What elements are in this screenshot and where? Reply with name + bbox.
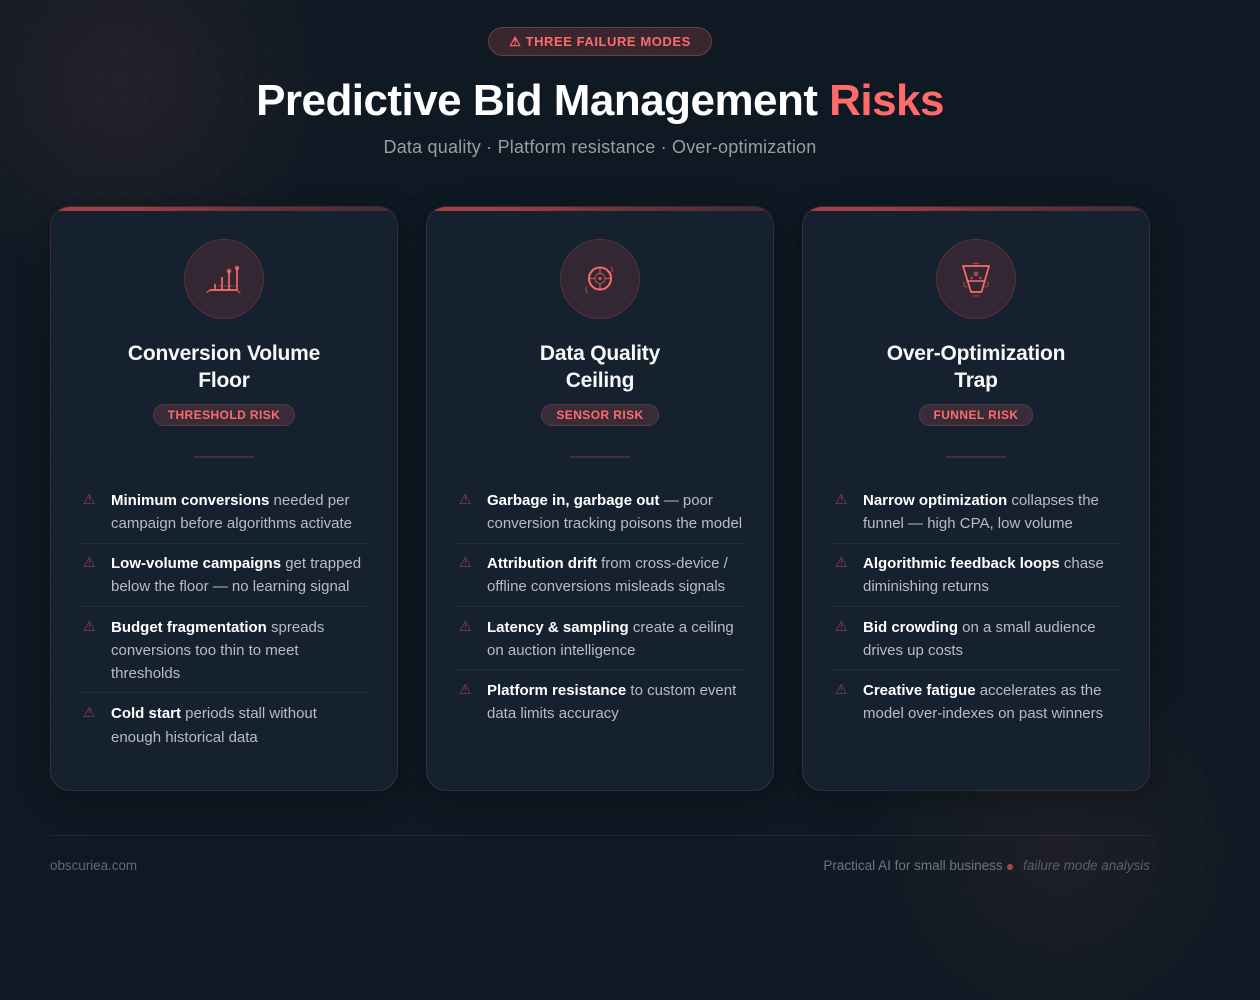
bullet: platform resistance xyxy=(459,681,736,722)
heading: conversion volume floor xyxy=(128,342,320,392)
bullet: algorithmic feedback loops: ⚠ xyxy=(835,554,848,570)
bullet: latency and sampling: on auction intelligence xyxy=(487,642,635,659)
bullet: low-volume campaigns: below the floor — no learning signal xyxy=(111,578,349,595)
subtitle: Data quality · Platform resistance · Over-optimization xyxy=(384,137,816,157)
bullet: low-volume campaigns: Low-volume campaigns get trapped xyxy=(111,555,361,572)
heading: over-optimization trap: Over-Optimization xyxy=(887,342,1065,365)
heading: data quality ceiling: Data Quality xyxy=(540,342,660,365)
heading: data quality ceiling: Ceiling xyxy=(566,369,634,392)
bullet: budget fragmentation: ⚠ xyxy=(83,618,96,634)
bullet: platform resistance: data limits accuracy xyxy=(487,705,619,722)
bullet: minimum conversions: Minimum conversions needed per xyxy=(111,492,349,509)
bullet: attribution drift xyxy=(459,554,728,595)
heading: conversion volume floor: Floor xyxy=(198,369,250,392)
bullet: bid crowding xyxy=(835,618,1096,659)
bullet: budget fragmentation: Budget fragmentation spreads xyxy=(111,619,324,636)
icon: sensor target xyxy=(560,239,640,319)
bullet: narrow optimization: Narrow optimization collapses the xyxy=(863,492,1099,509)
icon: funnel xyxy=(936,239,1016,319)
bullet: cold start: Cold start periods stall without xyxy=(111,705,317,722)
bullet: budget fragmentation: thresholds xyxy=(111,665,180,682)
bullet: low-volume campaigns: ⚠ xyxy=(83,554,96,570)
bullet: platform resistance: ⚠ xyxy=(459,681,472,697)
bullet: garbage in: Garbage in, garbage out — poor xyxy=(487,492,713,509)
bullet: bid crowding: ⚠ xyxy=(835,618,848,634)
footer: tagline: Practical AI for small business failure mode analysis xyxy=(823,858,1150,873)
bullet: creative fatigue: ⚠ xyxy=(835,681,848,697)
bullet: attribution drift: Attribution drift from cross-device / xyxy=(487,555,728,572)
bullet: bid crowding: drives up costs xyxy=(863,642,963,659)
bullet: attribution drift: offline conversions misleads signals xyxy=(487,578,725,595)
tag: sensor risk xyxy=(541,404,659,426)
heading: conversion volume floor: Conversion Volume xyxy=(128,342,320,365)
bullet: creative fatigue: model over-indexes on past winners xyxy=(863,705,1103,722)
bullet: latency and sampling xyxy=(459,618,734,659)
bullet: cold start xyxy=(83,704,317,746)
bullet: creative fatigue: Creative fatigue accelerates as the xyxy=(863,682,1101,699)
tag: sensor risk: SENSOR RISK xyxy=(556,408,644,422)
bullet: attribution drift: ⚠ xyxy=(459,554,472,570)
bullet: algorithmic feedback loops: Algorithmic feedback loops chase xyxy=(863,555,1104,572)
bullet: algorithmic feedback loops: diminishing returns xyxy=(863,578,989,595)
bullet: garbage in: conversion tracking poisons the model xyxy=(487,515,742,532)
bullet: garbage in: ⚠ xyxy=(459,491,472,507)
tag: funnel risk xyxy=(919,404,1033,426)
tag: threshold risk: THRESHOLD RISK xyxy=(168,408,280,422)
bullet: minimum conversions xyxy=(83,491,352,532)
bullet: latency and sampling: Latency & sampling create a ceiling xyxy=(487,619,734,636)
panel: conversion volume floor xyxy=(50,206,398,791)
panel: over-optimization trap xyxy=(802,206,1150,791)
heading: over-optimization trap xyxy=(887,342,1065,392)
tag: funnel risk: FUNNEL RISK xyxy=(933,408,1019,422)
bullet: algorithmic feedback loops xyxy=(835,554,1104,595)
badge: three failure modes: ⚠ THREE FAILURE MODES xyxy=(509,34,691,49)
panel: data quality ceiling xyxy=(426,206,774,791)
bullet: cold start: enough historical data xyxy=(111,729,258,746)
icon: bar chart threshold xyxy=(184,239,264,319)
bullet: minimum conversions: campaign before algorithms activate xyxy=(111,515,352,532)
bullet: platform resistance: Platform resistance to custom event xyxy=(487,682,736,699)
heading: data quality ceiling xyxy=(540,342,660,392)
bullet: narrow optimization: ⚠ xyxy=(835,491,848,507)
footer: site name: obscuriea.com xyxy=(50,858,137,873)
badge: three failure modes xyxy=(488,27,712,56)
bullet: narrow optimization xyxy=(835,491,1099,532)
bullet: creative fatigue xyxy=(835,681,1103,722)
bullet: low-volume campaigns xyxy=(83,554,361,595)
title: Predictive Bid Management Risks xyxy=(256,76,944,125)
bullet: garbage in xyxy=(459,491,742,532)
bullet: latency and sampling: ⚠ xyxy=(459,618,472,634)
bullet: minimum conversions: ⚠ xyxy=(83,491,96,507)
heading: over-optimization trap: Trap xyxy=(954,369,998,392)
bullet: budget fragmentation xyxy=(83,618,324,682)
bullet: cold start: ⚠ xyxy=(83,704,96,720)
tag: threshold risk xyxy=(153,404,295,426)
bullet: bid crowding: Bid crowding on a small audience xyxy=(863,619,1096,636)
bullet: narrow optimization: funnel — high CPA, low volume xyxy=(863,515,1073,532)
bullet: budget fragmentation: conversions too thin to meet xyxy=(111,642,299,659)
